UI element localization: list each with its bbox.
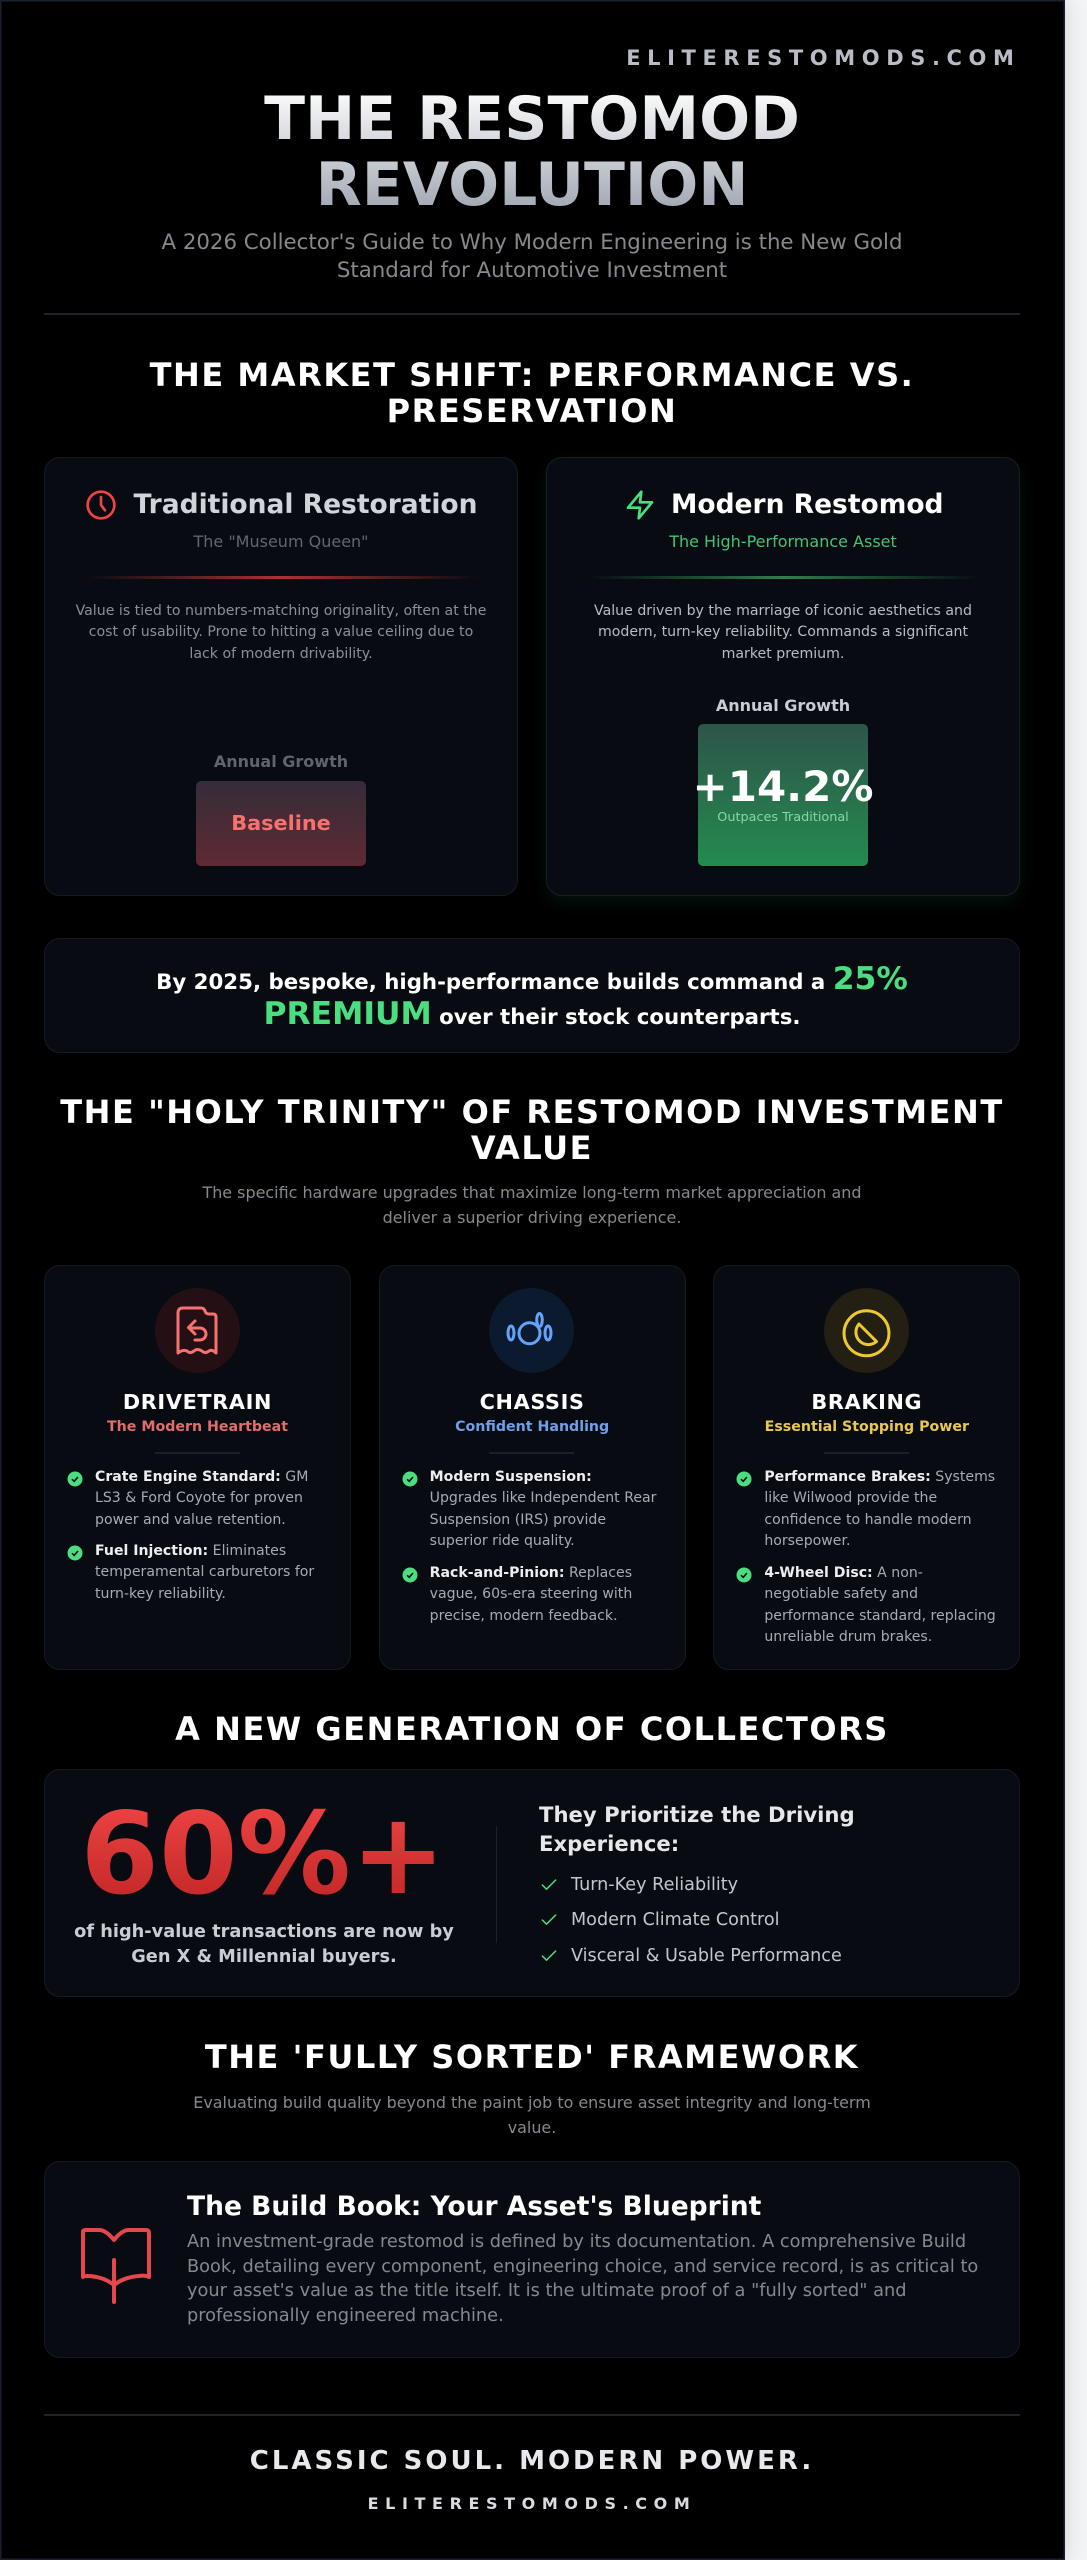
subtitle: A 2026 Collector's Guide to Why Modern Engineering is the New Gold (161, 230, 902, 254)
bullet text (430, 1565, 632, 1624)
heading: market shift: PRESERVATION (387, 392, 677, 430)
title: REVOLUTION (316, 150, 748, 220)
build book text (187, 2232, 978, 2326)
bullet text: precise, modern feedback. (430, 1608, 618, 1624)
footer site name: ELITERESTOMODS.COM (368, 2494, 696, 2513)
title (264, 84, 800, 220)
icon: chassis (489, 1288, 574, 1373)
bar value: Baseline (231, 811, 331, 835)
icon: clock (86, 490, 116, 520)
bullet: crate engine (68, 1469, 308, 1528)
panel: drivetrain (44, 1265, 351, 1670)
bullet text: Upgrades like Independent Rear (430, 1490, 656, 1506)
list item (542, 1910, 780, 1930)
item text: Turn-Key Reliability (571, 1875, 738, 1895)
card description: market premium. (722, 646, 844, 662)
bullet text (430, 1469, 656, 1549)
callout: premium (44, 938, 1020, 1053)
section intro: deliver a superior driving experience. (383, 1208, 681, 1227)
card subheading: The High-Performance Asset (669, 532, 897, 551)
card description: Value driven by the marriage of iconic aesthetics and (594, 603, 972, 619)
site name top: ELITERESTOMODS.COM (626, 46, 1020, 70)
icon: lightning bolt (626, 490, 654, 520)
heading: holy trinity (60, 1093, 1004, 1166)
list item (542, 1946, 842, 1966)
bullet text: confidence to handle modern (764, 1512, 972, 1528)
icon: check (402, 1472, 418, 1486)
card heading: Modern Restomod (671, 488, 944, 520)
icon: check (68, 1472, 82, 1486)
bullet text: 4-Wheel Disc: A non- (764, 1565, 923, 1581)
card title: BRAKING (811, 1390, 922, 1414)
heading: market shift: THE MARKET SHIFT: PERFORMANCE VS. (150, 356, 914, 394)
card subheading: The "Museum Queen" (193, 532, 369, 551)
panel: modern restomod (546, 457, 1020, 896)
stat caption (74, 1922, 454, 1967)
bullet text: temperamental carburetors for (95, 1564, 314, 1580)
icon: check (736, 1472, 752, 1486)
bullet text: negotiable safety and (764, 1586, 918, 1602)
list heading: They Prioritize the Driving (539, 1802, 855, 1827)
bullet text: performance standard, replacing (764, 1608, 996, 1624)
list item (542, 1875, 738, 1895)
card description: cost of usability. Prone to hitting a value ceiling due to (89, 624, 473, 640)
bullet text: Rack-and-Pinion: Replaces (430, 1565, 632, 1581)
bullet text: Suspension (IRS) provide (430, 1512, 606, 1528)
bar value: +14.2% (693, 762, 873, 811)
card description: modern, turn-key reliability. Commands a significant (598, 624, 968, 640)
icon: drivetrain (155, 1288, 240, 1373)
bullet text: power and value retention. (95, 1512, 286, 1528)
subtitle: Standard for Automotive Investment (337, 258, 727, 282)
stat caption: Gen X & Millennial buyers. (131, 1947, 397, 1967)
card description (76, 603, 486, 662)
callout text (156, 960, 908, 1032)
card subtitle: Essential Stopping Power (765, 1419, 969, 1435)
card subtitle: Confident Handling (455, 1419, 609, 1435)
icon: open book (81, 2228, 151, 2304)
item text: Visceral & Usable Performance (571, 1946, 842, 1966)
icon: check (68, 1546, 82, 1560)
bullet text: unreliable drum brakes. (764, 1629, 932, 1645)
bar: baseline (196, 781, 366, 866)
bullet: performance brakes (736, 1469, 995, 1549)
panel: chassis (379, 1265, 686, 1670)
icon: check (542, 1879, 556, 1890)
list heading (539, 1802, 855, 1856)
bar note: Outpaces Traditional (717, 810, 849, 825)
icon: check (542, 1914, 556, 1925)
build book text: An investment-grade restomod is defined by its documentation. A comprehensive Build (187, 2232, 966, 2252)
heading: holy trinity: VALUE (471, 1128, 593, 1166)
list heading: Experience: (539, 1830, 679, 1856)
card subtitle: The Modern Heartbeat (107, 1419, 288, 1435)
build book text: professionally engineered machine. (187, 2306, 504, 2326)
bar: growth (698, 724, 868, 866)
build book text: your asset's value as the title itself. It is the ultimate proof of a "fully sorted" and (187, 2281, 906, 2301)
icon: check (736, 1568, 752, 1582)
bullet text: vague, 60s-era steering with (430, 1586, 632, 1602)
bullet text: Modern Suspension: (430, 1469, 592, 1485)
icon: check (542, 1950, 556, 1961)
section intro: Evaluating build quality beyond the paint job to ensure asset integrity and long-term (193, 2093, 871, 2112)
bullet text: like Wilwood provide the (764, 1490, 937, 1506)
label: annual growth: Annual Growth (214, 752, 348, 771)
footer tagline: CLASSIC SOUL. MODERN POWER. (250, 2446, 814, 2476)
heading: new generation: A NEW GENERATION OF COLLECTORS (175, 1710, 889, 1748)
heading: holy trinity: THE "HOLY TRINITY" OF RESTOMOD INVESTMENT (60, 1093, 1004, 1131)
section intro (193, 2093, 871, 2137)
build book text: Book, detailing every component, engineering choice, and service record, is as critical to (187, 2257, 978, 2277)
card title: DRIVETRAIN (123, 1390, 272, 1414)
icon: braking (824, 1288, 909, 1373)
bullet: fuel injection (68, 1543, 314, 1602)
bullet: 4-wheel disc (736, 1565, 996, 1645)
section intro (202, 1183, 862, 1227)
section intro: The specific hardware upgrades that maximize long-term market appreciation and (202, 1183, 862, 1202)
panel: braking (713, 1265, 1020, 1670)
bullet: modern suspension (402, 1469, 656, 1549)
card description: Value is tied to numbers-matching originality, often at the (76, 603, 486, 619)
section intro: value. (508, 2118, 556, 2137)
panel: build book (44, 2161, 1020, 2358)
stat caption: of high-value transactions are now by (74, 1922, 454, 1942)
build book heading: The Build Book: Your Asset's Blueprint (187, 2191, 761, 2222)
bullet text: Fuel Injection: Eliminates (95, 1543, 286, 1559)
bullet text: horsepower. (764, 1533, 850, 1549)
bullet: rack and pinion (402, 1565, 632, 1624)
title: THE RESTOMOD (264, 84, 800, 154)
bullet text: Performance Brakes: Systems (764, 1469, 995, 1485)
stat: 60 percent: 60%+ (80, 1788, 446, 1920)
panel: traditional restoration (44, 457, 518, 896)
card title: CHASSIS (480, 1390, 585, 1414)
bullet text: Crate Engine Standard: GM (95, 1469, 308, 1485)
card heading: Traditional Restoration (134, 488, 477, 520)
bullet text (95, 1543, 314, 1602)
bullet text (95, 1469, 308, 1528)
callout text: By 2025, bespoke, high-performance builds command a 25% (156, 960, 908, 996)
card description (594, 603, 972, 662)
heading: market shift (150, 356, 914, 430)
item text: Modern Climate Control (571, 1910, 780, 1930)
icon: check (402, 1568, 418, 1582)
card description: lack of modern drivability. (189, 646, 373, 662)
bullet text: turn-key reliability. (95, 1586, 226, 1602)
bullet text: LS3 & Ford Coyote for proven (95, 1490, 303, 1506)
heading: fully sorted: THE 'FULLY SORTED' FRAMEWORK (205, 2038, 859, 2076)
callout text: PREMIUM over their stock counterparts. (263, 996, 801, 1032)
label: annual growth: Annual Growth (716, 696, 850, 715)
bullet text (764, 1469, 995, 1549)
bullet text (764, 1565, 996, 1645)
panel: collectors (44, 1769, 1020, 1997)
bullet text: superior ride quality. (430, 1533, 575, 1549)
subtitle (161, 230, 902, 282)
